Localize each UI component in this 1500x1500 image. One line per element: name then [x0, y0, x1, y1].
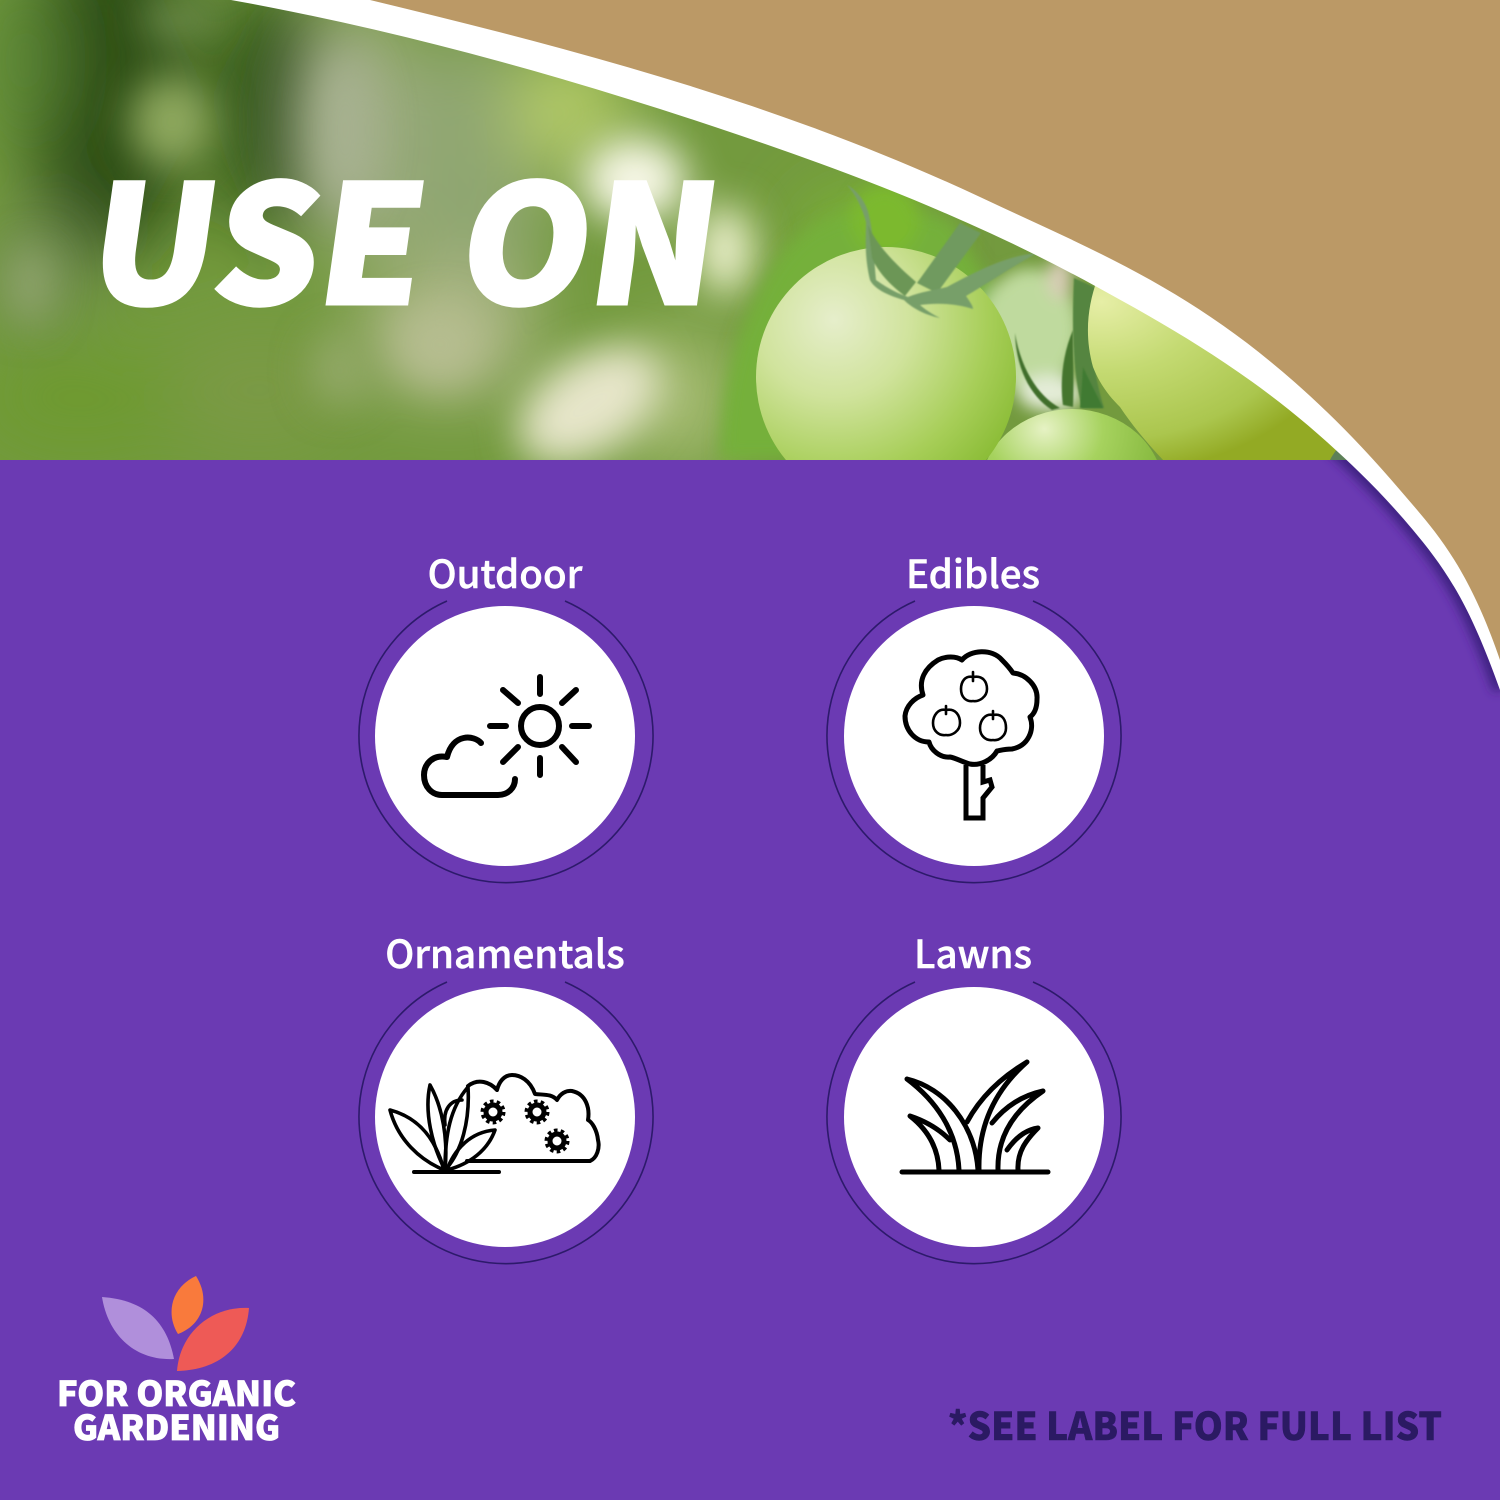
logo: for organic gardening: GARDENING	[73, 1401, 280, 1450]
ring	[359, 601, 653, 883]
icon: plant and flowering shrub	[390, 1075, 599, 1172]
ring	[359, 982, 653, 1264]
tomato: lower	[987, 409, 1157, 460]
white disc	[375, 987, 635, 1247]
logo: for organic gardening	[57, 1276, 296, 1450]
curved band: white swoosh	[231, 0, 1500, 690]
icon: grass	[902, 1062, 1048, 1172]
edge shadow on purple	[1327, 442, 1500, 690]
item: Ornamentals	[359, 924, 653, 1264]
logo leaf: red	[177, 1308, 249, 1371]
item: Outdoor	[359, 544, 653, 883]
curved band: tan corner	[370, 0, 1500, 660]
label: Lawns: Lawns	[914, 924, 1032, 980]
white disc	[844, 606, 1104, 866]
label: Outdoor: Outdoor	[428, 544, 583, 600]
label: Ornamentals: Ornamentals	[385, 924, 625, 980]
icon: sun and cloud	[424, 677, 589, 795]
label: Edibles: Edibles	[906, 544, 1040, 600]
tomato: dark stem at edge	[1330, 450, 1346, 460]
footnote: *SEE LABEL FOR FULL LIST	[948, 1396, 1442, 1451]
tomato: large left	[756, 247, 1016, 460]
tomato: calyx and stem	[847, 185, 1103, 410]
logo leaf: orange	[172, 1276, 203, 1334]
white disc	[844, 987, 1104, 1247]
item: Lawns	[827, 924, 1121, 1264]
title: USE ON	[77, 115, 737, 352]
tomato: back stems	[1073, 278, 1104, 408]
logo leaf: lilac	[102, 1297, 174, 1359]
tomato: right	[1088, 286, 1336, 460]
icon: apple tree	[905, 652, 1037, 818]
item: Edibles	[827, 544, 1121, 883]
white disc	[375, 606, 635, 866]
ring	[827, 601, 1121, 883]
photo: green tomatoes	[0, 0, 1346, 460]
ring	[827, 982, 1121, 1264]
logo text: FOR ORGANIC	[57, 1367, 296, 1416]
